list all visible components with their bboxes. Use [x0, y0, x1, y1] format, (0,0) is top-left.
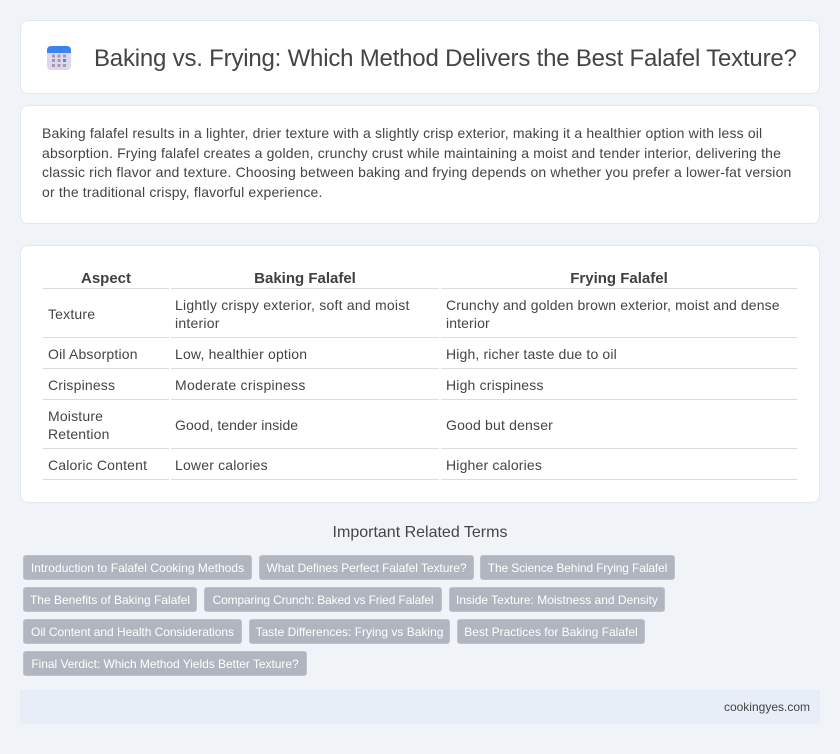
row: texture: Texture [48, 306, 95, 322]
intro paragraph [42, 125, 791, 200]
row: caloric content: Higher calories [446, 457, 542, 473]
table header [81, 270, 668, 287]
related terms tags: Comparing Crunch: Baked vs Fried Falafel [213, 593, 433, 607]
row: oil absorption: High, richer taste due to oil [446, 346, 617, 362]
row: crispiness: High crispiness [446, 377, 544, 393]
footer bar [20, 690, 820, 724]
related terms tags: Oil Content and Health Considerations [31, 625, 234, 639]
row: moisture retention: Good but denser [446, 417, 553, 433]
panel: intro text [20, 105, 820, 224]
row: moisture retention: Good, tender inside [175, 417, 298, 433]
row: moisture retention: Moisture [48, 408, 103, 424]
related terms tags: Final Verdict: Which Method Yields Better Texture? [31, 657, 299, 671]
intro paragraph: classic rich flavor and texture. Choosing between baking and frying depends on whether you prefer a lower-fat version [42, 164, 791, 180]
table header: Frying Falafel [570, 270, 668, 287]
row: moisture retention [48, 408, 553, 442]
row: texture: Crunchy and golden brown exterior, moist and dense [446, 297, 780, 313]
row: oil absorption [48, 346, 617, 362]
icon: calendar [47, 46, 71, 70]
row: caloric content: Caloric Content [48, 457, 147, 473]
intro paragraph: or the traditional crispy, flavorful experience. [42, 184, 323, 200]
panel: comparison table [20, 245, 820, 503]
row: caloric content [48, 457, 542, 473]
row: texture: interior [175, 315, 220, 331]
row: crispiness: Crispiness [48, 377, 115, 393]
row: caloric content: Lower calories [175, 457, 268, 473]
related terms tags [23, 555, 675, 676]
related terms heading: Important Related Terms [333, 524, 507, 541]
row: crispiness: Moderate crispiness [175, 377, 306, 393]
table header: Baking Falafel [254, 270, 356, 287]
row: oil absorption: Oil Absorption [48, 346, 138, 362]
title: Baking vs. Frying: Which Method Delivers the Best Falafel Texture? [94, 45, 797, 72]
related terms tags: Taste Differences: Frying vs Baking [256, 625, 443, 639]
table header: Aspect [81, 270, 131, 287]
row: moisture retention: Retention [48, 426, 110, 442]
intro paragraph: absorption. Frying falafel creates a golden, crunchy crust while maintaining a moist and tender interior, delivering the [42, 145, 781, 161]
related terms tags: The Science Behind Frying Falafel [488, 561, 667, 575]
row: texture: interior [446, 315, 490, 331]
row: oil absorption: Low, healthier option [175, 346, 307, 362]
header card [20, 20, 820, 94]
row: crispiness [48, 377, 544, 393]
related terms tags: What Defines Perfect Falafel Texture? [266, 561, 467, 575]
footer source: cookingyes.com [724, 700, 810, 714]
related terms tags: Introduction to Falafel Cooking Methods [31, 561, 244, 575]
related terms tags: Inside Texture: Moistness and Density [456, 593, 658, 607]
related terms tags: The Benefits of Baking Falafel [30, 593, 190, 607]
row: texture [48, 297, 780, 331]
related terms tags: Best Practices for Baking Falafel [464, 625, 638, 639]
intro paragraph: Baking falafel results in a lighter, drier texture with a slightly crisp exterior, making it a healthier option with less oil [42, 125, 762, 141]
row: texture: Lightly crispy exterior, soft and moist [175, 297, 410, 313]
